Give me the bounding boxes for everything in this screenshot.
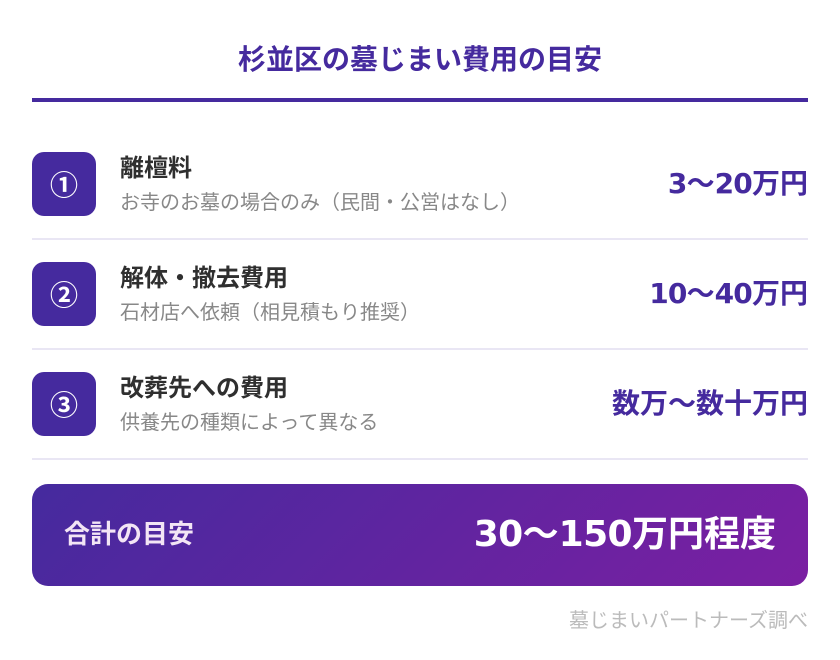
total label: 合計の目安 bbox=[64, 520, 194, 550]
row 2: demolition bbox=[32, 262, 808, 326]
row 1 price: 3〜20万円 bbox=[668, 167, 808, 200]
total banner bbox=[32, 484, 808, 586]
row 3 name: 改葬先への費用 bbox=[120, 374, 288, 402]
badge 2: ② bbox=[50, 274, 78, 314]
row 3: reburial bbox=[32, 372, 808, 436]
row 2 price: 10〜40万円 bbox=[649, 277, 808, 310]
row 2 description: 石材店へ依頼（相見積もり推奨） bbox=[120, 300, 420, 324]
badge 3: ③ bbox=[50, 384, 78, 424]
badge 2 bbox=[32, 262, 96, 326]
row 3 price: 数万〜数十万円 bbox=[612, 387, 808, 420]
badge 3 bbox=[32, 372, 96, 436]
row 1 description: お寺のお墓の場合のみ（民間・公営はなし） bbox=[120, 190, 520, 214]
row 1: rikon-ryo bbox=[32, 152, 808, 216]
badge 1 bbox=[32, 152, 96, 216]
title: 杉並区の墓じまい費用の目安 bbox=[238, 43, 602, 76]
row 2 name: 解体・撤去費用 bbox=[120, 264, 288, 292]
title rule bbox=[32, 98, 808, 102]
row 3 description: 供養先の種類によって異なる bbox=[120, 410, 378, 434]
row 1 name: 離檀料 bbox=[120, 154, 192, 182]
badge 1: ① bbox=[50, 164, 78, 204]
total amount: 30〜150万円程度 bbox=[474, 514, 776, 555]
source note: 墓じまいパートナーズ調べ bbox=[569, 608, 808, 632]
